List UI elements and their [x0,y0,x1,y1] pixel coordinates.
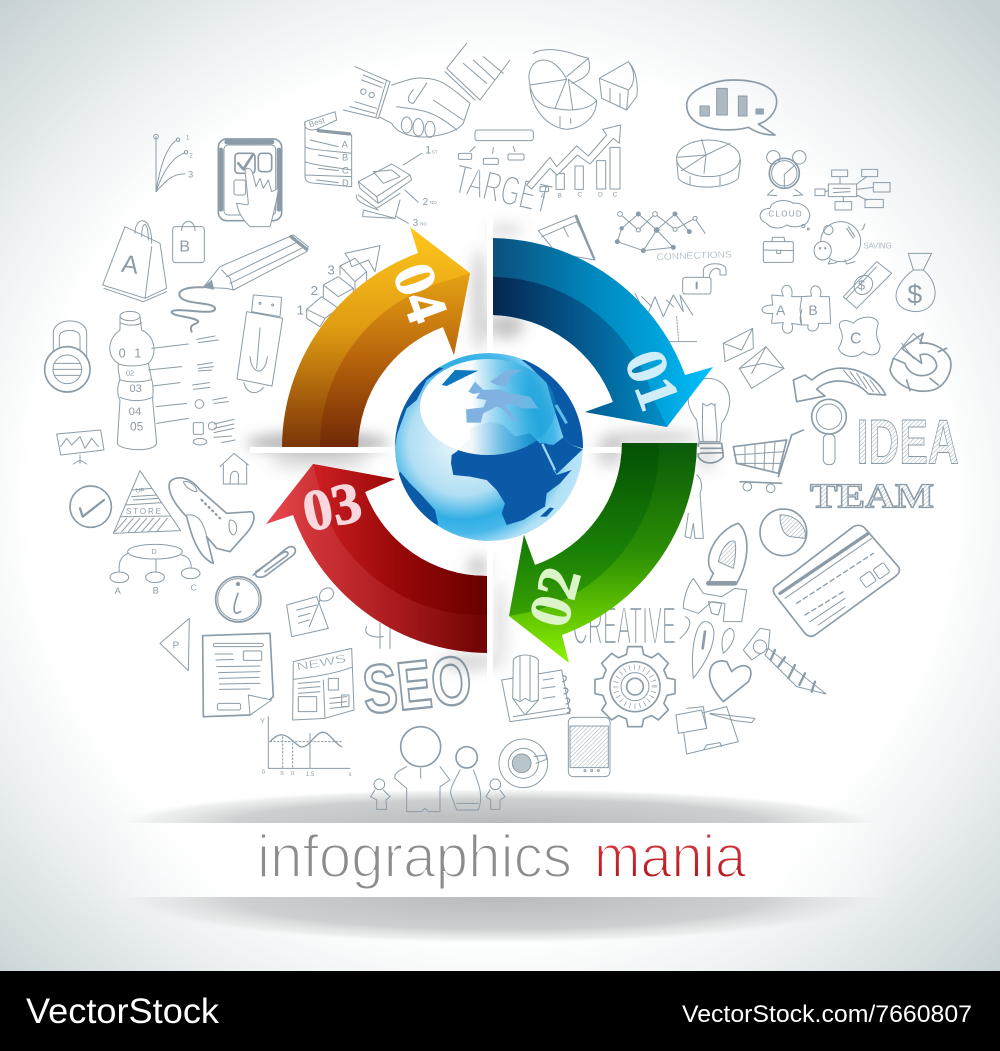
icon: branching curves: 1 [186,135,190,141]
icon: org diagram: B [153,585,159,595]
icon: rocket plane [169,478,254,563]
icon: rising arrow chart: B [557,192,562,199]
icon: money bag: $ [907,279,922,309]
icon: rising arrow chart: D [598,192,603,199]
footer bar [0,971,1000,1051]
icon: stack of books [356,144,438,229]
icon: connections network [615,212,732,262]
icon: document page [203,633,273,717]
globe highlight [420,359,556,455]
soft shadows behind the arrow cross [246,224,716,670]
icon: gear [595,647,675,727]
icon: stack of books: 3 [413,218,419,229]
icon: rising arrow chart: A [541,193,546,200]
arrow 04: orange [282,227,470,447]
icon: best list drum [305,112,352,188]
icon: family figures [371,727,505,812]
white disk behind globe [358,315,622,579]
arrow 03: red [266,464,487,653]
icon: stairs with arrow [297,246,380,327]
title band [100,823,900,897]
icon: briefcase [763,237,793,262]
icon: handshake [343,43,510,137]
doodles: left group [45,311,263,596]
icon: figure beside green arrow [685,475,703,538]
icon: credit card [773,525,899,636]
icon: flat pie chart [677,139,741,187]
label: CONNECTIONS: CONNECTIONS [656,249,732,262]
icon: curved arrow [793,368,886,402]
footer logo text: VectorStock [26,992,220,1031]
globe [393,353,590,541]
icon: stack of books: ST [432,149,438,154]
icon: shopping bag B: B [179,239,190,256]
arrow 02: green [509,443,697,663]
icon: pyramid [113,471,181,533]
title: infographics mania [257,823,747,890]
icon: pyramid: UP [135,488,145,495]
icon: function graph: 1.5 [306,772,315,778]
sea: Red Sea [542,444,555,470]
icon: bottle infographic: 05 [130,420,144,434]
icon: rising arrow chart: C [613,192,618,199]
title: infographics mania: mania [594,823,747,890]
ground shadow below title band [149,897,848,941]
icon: bottle infographic: 02 [126,368,134,377]
icon: shopping cart [733,430,803,493]
icon: necktie [743,628,826,694]
islands: UK [468,382,485,394]
icon: stairs with arrow: 2 [311,283,318,298]
icon: rocket [683,523,747,622]
icon: bottle infographic: 03 [129,383,142,395]
icon: shopping bag B [173,221,204,263]
icon: function graph [260,716,352,778]
continent: Africa [451,422,572,525]
icon: envelopes [723,328,784,388]
icon: puzzle piece C: C [850,330,862,347]
icon: folder with notes and pen [676,707,755,754]
arrow 01: blue [493,238,713,427]
icon: bottle infographic [110,311,235,450]
icon: small pie [760,509,807,556]
icon: function graph: 0 [262,770,266,776]
icon: magnifier [812,399,846,465]
continent: Arabia [542,437,583,474]
icon: org diagram [110,544,200,596]
heading: TARGET doodle: TARGET [450,155,556,223]
icon: stack of books: ND [430,200,437,205]
number 03: 03 [297,469,367,544]
icon: light bulb [688,378,730,463]
icon: pinned note [287,588,334,637]
heading: TEAM doodle: TEAM [810,477,934,515]
icon: padlock [45,321,90,392]
icon: banknote [843,262,892,308]
icon: stairs with arrow: 1 [297,303,304,318]
icon: best list drum: B [342,153,348,163]
icon: pencil with squiggle [172,235,308,332]
white cross dividers [250,215,700,685]
icon: cloud: CLOUD [768,210,802,219]
icon: open padlock [683,264,726,294]
icon: bottle infographic: 04 [129,406,141,418]
icon: info circle [216,577,261,622]
icon: heart [710,661,751,702]
icon: newspaper [293,648,354,720]
icon: floppy disk [538,215,595,260]
ground shadow above title band [142,790,856,823]
icon: rising arrow chart [527,125,621,200]
icon: cloud [760,201,810,230]
icon: banknote: $ [858,278,865,292]
icon: hash partly hidden [366,623,390,648]
icon: tablet with touching hand [218,139,282,227]
icon: smartphone [568,717,610,777]
doodles: lower left group [160,547,505,812]
icon: coffee cup [499,739,548,788]
icon: stack of books: 1 [425,144,431,156]
icon: presentation board [57,430,104,464]
icon: check badge [70,486,111,527]
continent: Scandinavia [490,369,523,387]
icon: branching curves: 2 [189,153,193,159]
continent: Madagascar [540,507,554,517]
icon: org boxes [458,130,533,164]
icon: pyramid: STORE [126,507,161,516]
sea: Caspian [556,405,567,423]
icon: org diagram: C [191,583,197,593]
icon: flame drops [680,617,734,678]
icon: recycle arrow top [893,333,950,360]
icon: USB stick [237,295,283,386]
icon: branching curves [154,134,193,192]
icon: 3D pie chart [529,50,637,129]
continent: Greenland [442,370,478,386]
continent: Europe [466,389,538,423]
continent: South America [397,472,438,525]
continent: North America [393,363,443,447]
doodles: top left group [103,43,533,386]
number 01: 01 [612,341,693,418]
icon: triangle ruler [160,618,189,671]
icon: paperclip [253,547,295,577]
icon: alarm clock [767,151,806,196]
doodles: lower right group: CREATIVE [573,597,676,656]
icon: piggy bank [814,222,892,264]
footer url text: VectorStock.com/7660807 [682,1001,972,1028]
icon: puzzle piece C [838,317,880,356]
icon: stack of books: 2 [423,197,429,208]
doodles: top right group [527,50,950,360]
icon: function graph: x [349,772,352,778]
icon: speech bubble with bars [687,80,777,135]
icon: org diagram: D [151,547,157,556]
icon: recycle arrow [890,333,951,391]
icon: best list drum: D [342,178,349,188]
icon: org diagram: A [115,586,122,596]
icon: piggy bank: SAVING [863,242,892,251]
icon: mind map [815,169,890,210]
doodles: right group [680,328,959,702]
icon: puzzle pieces A and B: A [776,302,786,318]
icon: line chart with zigzag [635,293,697,342]
icon: house [220,453,248,484]
continent: Asia [522,360,583,448]
doodles: lower right group [499,597,755,788]
heading: SEO doodle: SEO [359,642,475,729]
icon: money bag [896,253,935,312]
icon: USB stick body cap [244,383,263,393]
icon: function graph: π [280,771,284,777]
icon: best list drum: Best [308,115,327,129]
icon: best list drum: A [342,139,349,149]
icon: stairs with arrow: 3 [327,263,335,278]
number 02: 02 [516,560,593,633]
icon: shopping bag A: A [120,250,141,280]
icon: function graph: π [291,771,295,777]
icon: puzzle pieces A and B: B [808,302,818,318]
icon: notepad and pencil [502,655,570,722]
icon: rising arrow chart: C [577,192,582,199]
icon: branching curves: 3 [188,170,193,180]
icon: best list drum: C [342,165,349,175]
icon: function graph: Y [260,716,265,725]
icon: shopping bag A [103,221,167,302]
icon: newspaper: NEWS [296,653,348,674]
title: infographics mania: infographics [257,823,572,890]
icon: puzzle pieces A and B [762,285,831,333]
icon: bottle infographic: 01 [119,346,141,360]
number 04: 04 [380,254,461,331]
icon: triangle ruler: P [173,640,180,651]
icon: stack of books: RD [420,221,427,226]
